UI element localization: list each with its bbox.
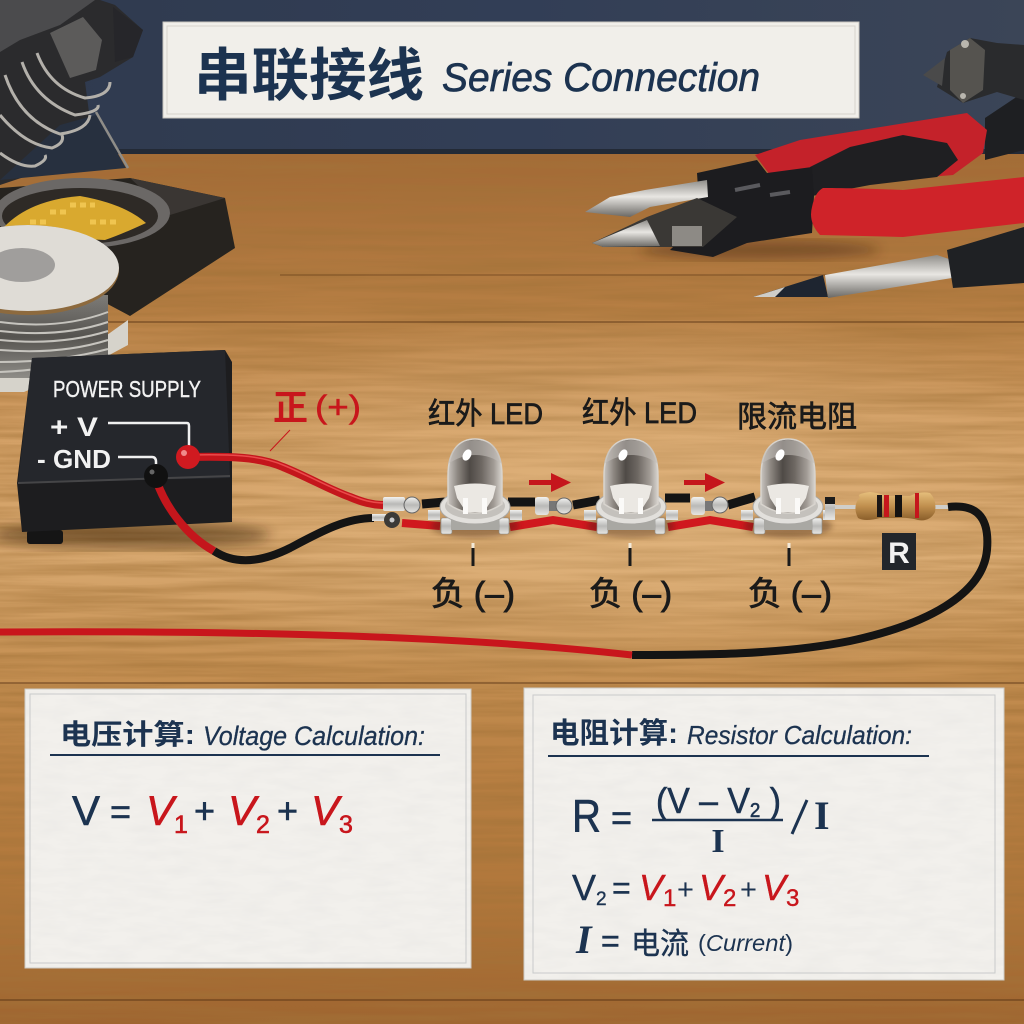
resistor tag: R	[888, 537, 910, 570]
current definition	[575, 917, 793, 962]
icon: sponge tray	[0, 178, 235, 316]
arrow: current 1	[529, 473, 571, 492]
formula: V	[146, 787, 174, 834]
label: power supply: POWER SUPPLY	[53, 376, 201, 402]
shadow under power supply	[0, 521, 270, 549]
formula R: R	[572, 790, 601, 842]
formula R: 2	[750, 800, 760, 822]
LED 2	[584, 439, 678, 538]
title banner: 串联接线	[194, 44, 424, 108]
heading: 电压计算:	[60, 719, 195, 750]
LED label 1: 红外 LED	[428, 398, 543, 431]
formula sum: +	[740, 874, 757, 906]
formula: =	[110, 791, 131, 832]
formula sum: +	[677, 874, 694, 906]
terminal: positive	[176, 445, 200, 469]
formula sum: 1	[663, 885, 676, 912]
resistor label text: 限流电阻	[737, 401, 857, 434]
LED label 2: 红外 LED	[582, 397, 697, 430]
icon: small screwdriver	[753, 227, 1024, 298]
formula: V	[311, 787, 339, 834]
formula: 1	[174, 811, 188, 839]
polarity ticks	[473, 543, 789, 566]
wire: negative red-black lead	[157, 482, 374, 560]
series chain wiring	[402, 497, 755, 527]
arrow: current 2	[684, 473, 725, 492]
formula sum: 2	[596, 889, 607, 910]
dark backdrop panel	[0, 0, 1024, 154]
panel: resistor calculation: I	[711, 823, 725, 860]
resistor tag	[882, 533, 916, 570]
icon: soldering iron stand	[0, 0, 143, 185]
title banner	[163, 22, 859, 118]
terminal: negative	[144, 464, 168, 488]
current definition: (Current)	[698, 930, 793, 956]
formula R: )	[760, 780, 781, 821]
formula sum: V	[572, 867, 596, 908]
label: +V: + V	[50, 412, 98, 442]
heading: 电阻计算:	[550, 717, 678, 750]
LED 1	[428, 439, 522, 538]
title banner: Series Connection	[442, 56, 760, 100]
formula sum: V	[762, 867, 786, 908]
formula sum	[572, 867, 799, 912]
current definition: I	[575, 917, 593, 962]
formula: +	[194, 790, 215, 831]
formula sum: 3	[786, 885, 799, 912]
label: positive	[270, 389, 361, 451]
wire: resistor to return	[0, 507, 987, 655]
formula	[72, 787, 353, 839]
negative label 3: 负 (–)	[748, 575, 832, 612]
panel: resistor calculation	[524, 688, 1004, 980]
icon: iron tip upper right	[923, 38, 1024, 103]
formula R: =	[611, 797, 632, 838]
panel: power supply box	[17, 350, 232, 544]
panel: voltage calculation	[25, 689, 471, 968]
current definition: 电流	[631, 928, 689, 961]
icon: pliers	[585, 92, 1024, 260]
connector chain	[372, 497, 728, 528]
formula sum: =	[612, 870, 631, 906]
LED 3	[741, 439, 835, 538]
label: -GND: - GND	[37, 444, 111, 474]
panel: resistor calculation: Resistor Calculation:	[687, 720, 912, 750]
icon: solder spool	[0, 225, 128, 392]
formula sum: V	[699, 867, 723, 908]
formula: V	[228, 787, 256, 834]
label: positive: (+)	[315, 389, 361, 425]
formula sum: V	[639, 867, 663, 908]
resistor	[835, 492, 950, 520]
formula: 3	[339, 811, 353, 839]
negative label 2: 负 (–)	[589, 575, 672, 612]
wire: positive red lead	[188, 455, 384, 505]
metal tab after LED 3	[825, 497, 835, 519]
formula R	[572, 780, 781, 842]
formula: 2	[256, 811, 270, 839]
negative label 1: 负 (–)	[431, 575, 515, 612]
panel: voltage calculation: Voltage Calculation:	[203, 721, 425, 751]
formula sum: 2	[723, 885, 736, 912]
formula R: (V – V	[656, 780, 756, 821]
panel: resistor calculation: I	[814, 793, 830, 838]
label: positive: 正	[273, 389, 308, 428]
current definition: =	[601, 923, 620, 959]
formula: +	[277, 790, 298, 831]
formula: V	[72, 787, 100, 834]
